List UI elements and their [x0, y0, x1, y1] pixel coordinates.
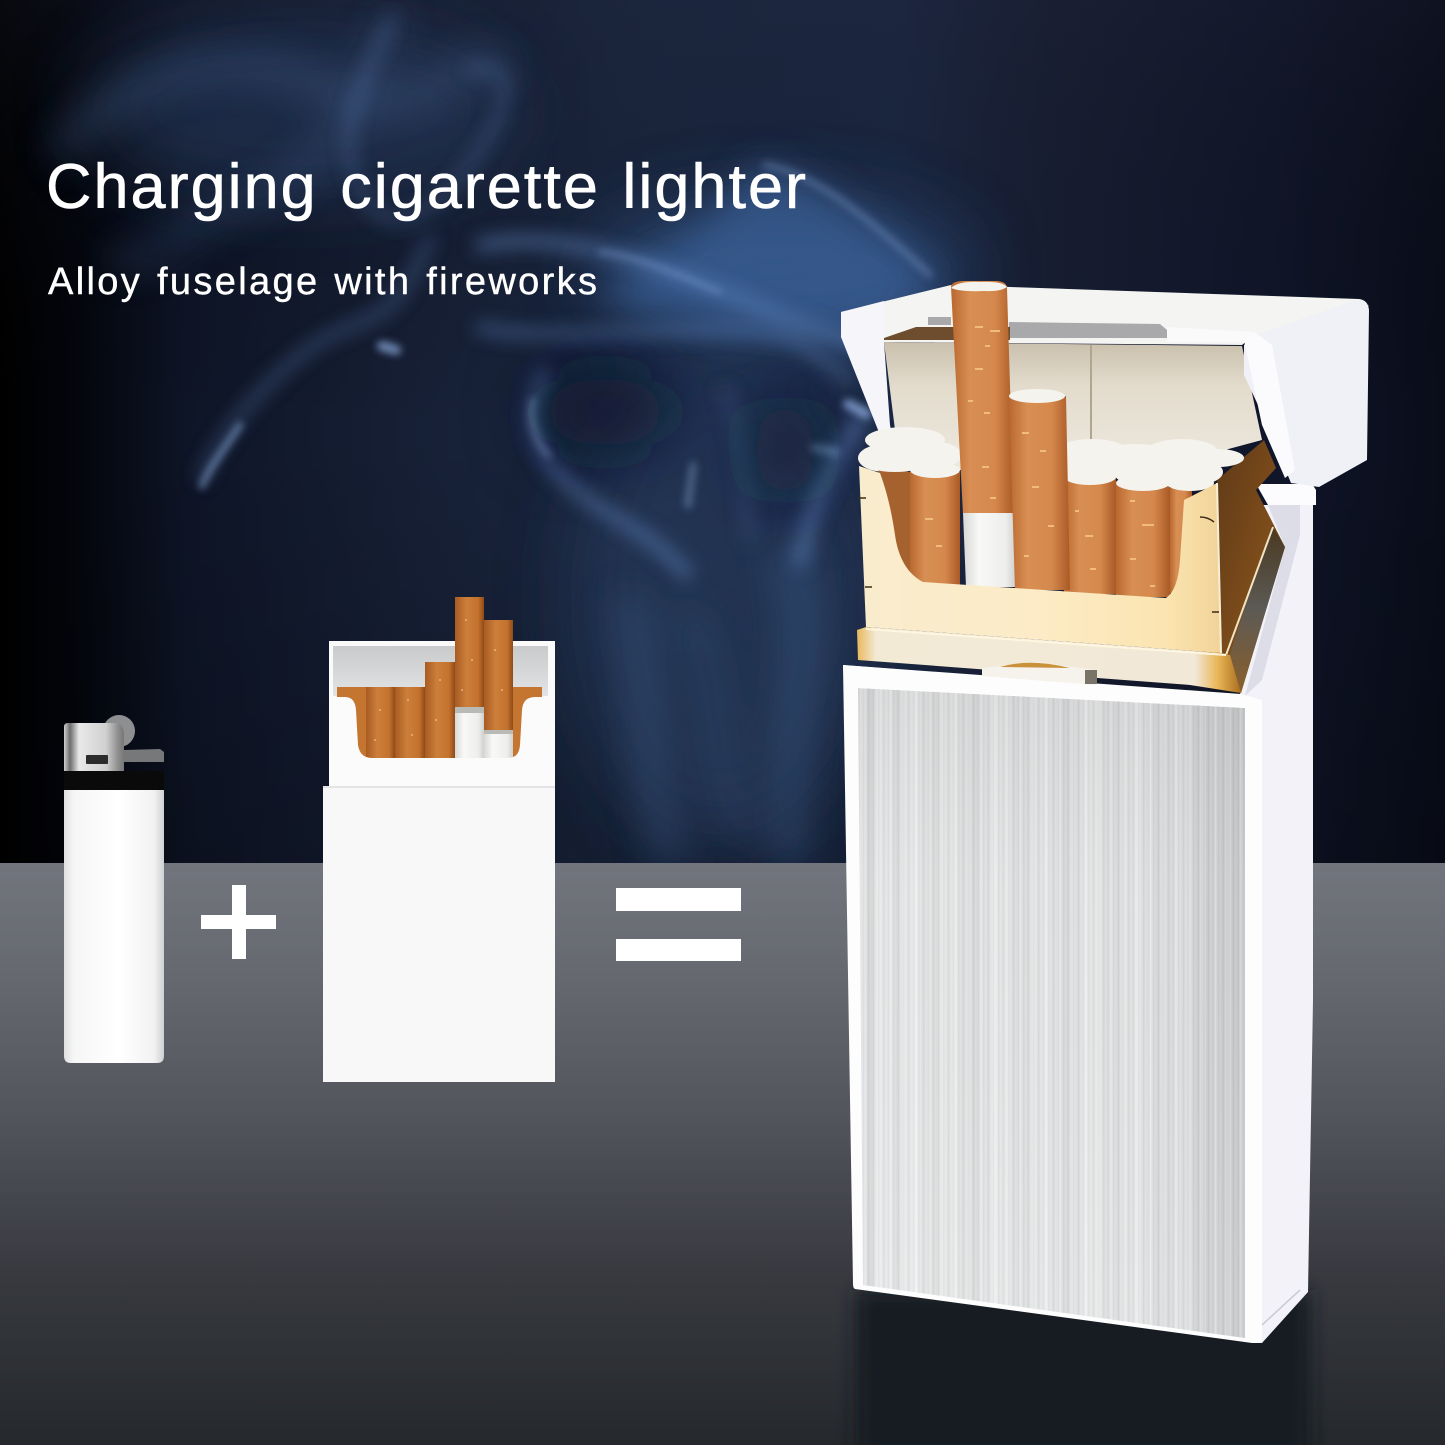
case front frame: [843, 665, 1262, 1343]
pack inner front flap: [329, 697, 555, 788]
inner box: dark right side: [1217, 440, 1285, 693]
plus sign: [201, 885, 276, 959]
icon: cigarette pack: [323, 597, 555, 1082]
pack back wall: [329, 641, 555, 701]
pack lower sleeve: [323, 787, 555, 1082]
title: Charging cigarette lighter: [46, 152, 806, 222]
pack cigarettes: [337, 597, 542, 759]
background: dark navy sky: [0, 0, 1445, 863]
skull eye sockets: [535, 376, 819, 505]
second tall cigarette: [1009, 396, 1070, 590]
icon: disposable lighter: [64, 715, 164, 1063]
background: blue smoke and skull: [60, 18, 970, 850]
lighter black band: [64, 771, 164, 791]
inner box: gold front: [859, 466, 1221, 653]
equals sign: [616, 888, 741, 961]
tobacco flecks: [925, 326, 1155, 587]
case side wall: [1240, 505, 1313, 1343]
case hinge bar: [1256, 484, 1316, 505]
case brushed panel: [858, 688, 1245, 1338]
case latch: [982, 662, 1096, 688]
lid: open top: [841, 285, 1369, 487]
white back cigarette tops: [858, 427, 1244, 487]
lid interior top face: [841, 285, 1369, 345]
lid left edge: [841, 301, 893, 445]
lighter metal hood: [64, 723, 124, 772]
inner box: lower tray: [857, 627, 1241, 693]
lid right panel: [1244, 299, 1369, 487]
background: grey floor: [0, 863, 1445, 1445]
lighter metal fork: [124, 749, 164, 762]
case top frame rim: [843, 665, 1245, 708]
case bottom edge: [1262, 1290, 1300, 1325]
product: lighter cigarette case: [841, 281, 1369, 1343]
lid inner back wall: [884, 342, 1262, 470]
case floor shadow: [856, 1290, 1310, 1445]
tall cigarette: [951, 281, 1014, 514]
subtitle: Alloy fuselage with fireworks: [48, 261, 597, 303]
lighter white body: [64, 790, 164, 1063]
lighter spark wheel: [103, 715, 135, 747]
cigarettes in case: [865, 281, 1214, 597]
